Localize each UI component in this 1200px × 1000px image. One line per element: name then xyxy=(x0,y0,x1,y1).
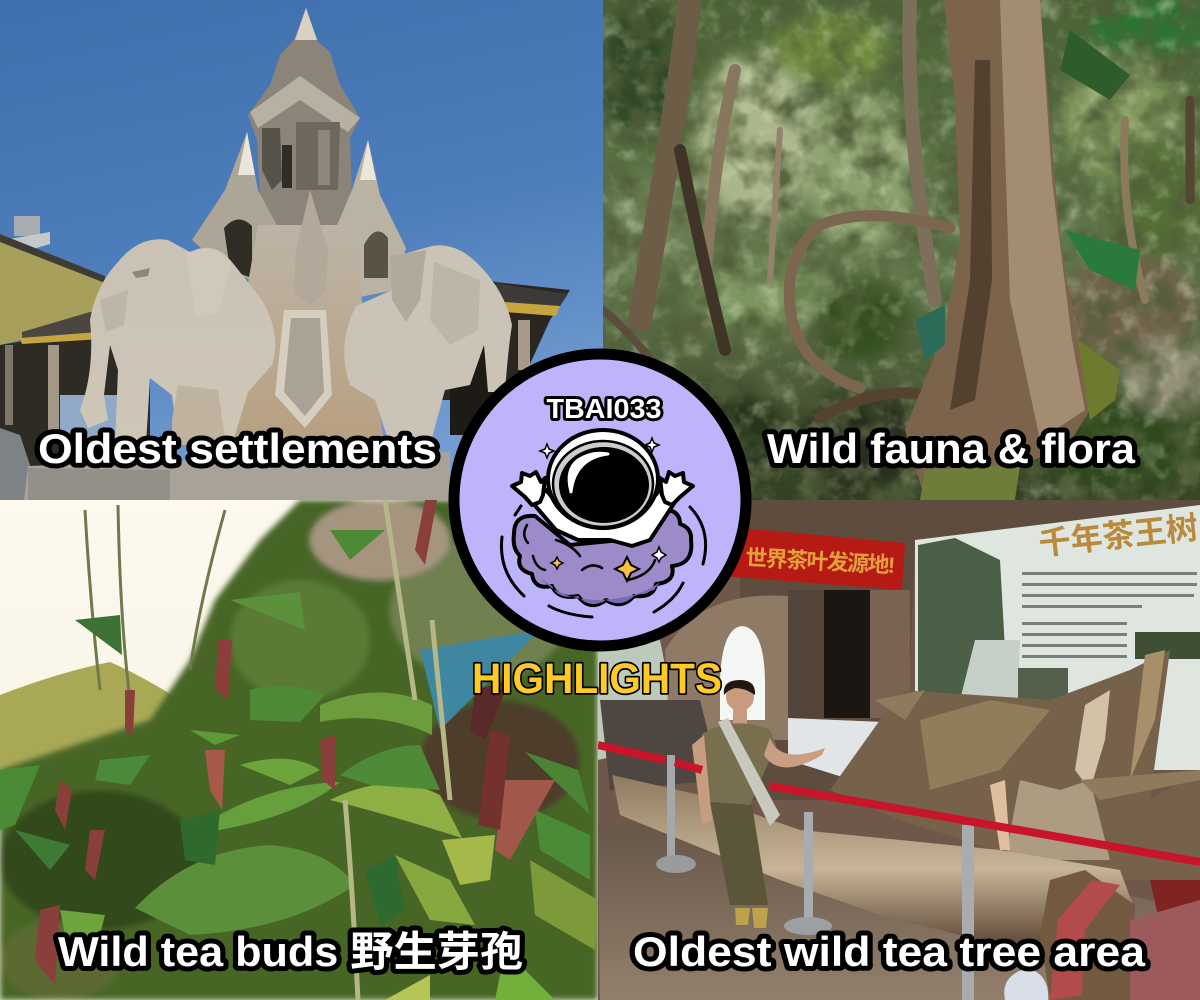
caption: oldest wild tea tree area: Oldest wild tea tree area xyxy=(633,928,1146,975)
dark pavilion xyxy=(0,280,570,466)
cave alcove xyxy=(598,595,788,760)
tea sprigs on sky xyxy=(85,505,225,700)
water tank xyxy=(12,216,50,248)
forest backdrop xyxy=(603,0,1200,500)
bright sky backdrop xyxy=(0,500,598,1000)
visor xyxy=(559,447,649,523)
badge: central circular logo xyxy=(454,354,746,646)
cloud puff lines xyxy=(524,525,655,580)
right elephant xyxy=(344,245,512,445)
board title: 千年茶王树 xyxy=(1037,509,1200,562)
tea leaves xyxy=(0,530,598,1000)
helmet xyxy=(548,430,658,528)
woman in camouflage xyxy=(692,680,825,928)
building roof edge xyxy=(0,234,105,283)
curved vine branch xyxy=(789,216,950,388)
pale stems xyxy=(345,500,450,1000)
red banner xyxy=(722,527,905,590)
low branches xyxy=(815,393,925,420)
left elephant xyxy=(80,239,275,445)
floor xyxy=(598,825,1200,1000)
caption: wild tea buds: Wild tea buds 野生芽孢 xyxy=(58,928,523,975)
badge disc xyxy=(454,354,746,646)
central stupa body xyxy=(234,225,383,440)
tree root mass xyxy=(830,650,1200,880)
central pillar xyxy=(294,190,328,305)
side spires xyxy=(192,132,406,300)
large fallen log xyxy=(612,775,1200,1000)
plinth shaded block xyxy=(28,468,170,500)
upper wall xyxy=(740,500,1200,800)
temple tower xyxy=(248,8,360,230)
motion lines xyxy=(501,506,706,617)
brown room wall xyxy=(598,500,1200,1000)
cloud shadow xyxy=(540,578,660,604)
distant hills xyxy=(0,662,172,770)
cloud xyxy=(514,510,691,605)
red rope barrier xyxy=(598,745,1200,862)
panel: oldest settlements photo xyxy=(0,0,603,500)
stanchion posts xyxy=(656,755,974,1000)
exhibition board xyxy=(915,505,1200,770)
caption: wild fauna and flora: Wild fauna & flora xyxy=(767,425,1136,472)
dark dry branches xyxy=(600,700,720,790)
foliage texture dark xyxy=(603,0,1200,500)
blue sky xyxy=(0,0,603,500)
sparkles xyxy=(540,444,554,458)
canopy light and foliage blobs xyxy=(600,0,1200,495)
caption: oldest settlements: Oldest settlements xyxy=(38,425,437,472)
car xyxy=(0,428,30,500)
white counter xyxy=(788,718,879,776)
red buds xyxy=(35,500,555,985)
panel: oldest wild tea tree area photo xyxy=(598,500,1200,1000)
yellow metal building xyxy=(0,234,105,345)
red banner: 世界茶叶发源地! xyxy=(745,545,896,578)
gloves xyxy=(512,472,545,505)
stone plinth xyxy=(24,452,450,500)
badge code text: TBAI033 xyxy=(546,393,662,424)
foliage leaves xyxy=(915,30,1140,360)
foliage texture light xyxy=(603,0,1200,500)
panel: wild fauna and flora photo xyxy=(600,0,1200,500)
panel: wild tea buds photo xyxy=(0,500,610,1000)
visor highlight xyxy=(569,453,608,492)
arms and torso xyxy=(532,490,675,546)
ornament panel xyxy=(275,310,332,428)
dark doorway column xyxy=(788,590,910,718)
background trunks xyxy=(603,0,1190,400)
icon: astronaut on a cloud xyxy=(501,430,706,617)
tea bush mass xyxy=(0,500,610,1000)
main trunk xyxy=(905,0,1120,500)
title: highlights: HIGHLIGHTS xyxy=(472,655,722,703)
